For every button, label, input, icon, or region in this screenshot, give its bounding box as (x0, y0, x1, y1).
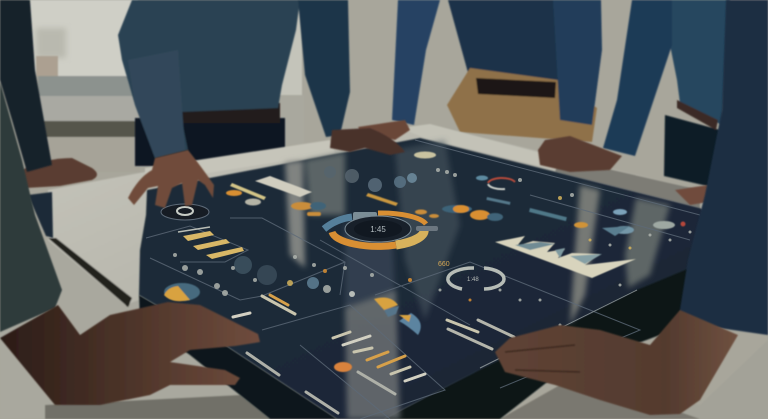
mountain area chart (495, 236, 636, 278)
pale ribbon and small gold marks (226, 152, 439, 218)
table surface and rim (48, 124, 705, 419)
hand: bottom-left foreground (0, 302, 260, 405)
person 3: standing figure with khaki trousers (392, 0, 602, 142)
gauge value and header figures: 660 (438, 261, 450, 268)
top-left mini gauge and yellow bar chart (161, 204, 244, 259)
lower bar list (233, 295, 514, 413)
hand: person 4 at right (675, 185, 708, 205)
person 1: left figure arm and torso (0, 0, 62, 332)
gauge value and header figures: 1:48 (467, 277, 479, 283)
person 4: right figure in navy (603, 0, 730, 188)
hand: person 2 left hand with fingers spread (128, 150, 214, 208)
upper-right pies and rings (442, 176, 686, 236)
window with bright view and sill (28, 0, 304, 172)
dark table reflection at left (28, 192, 53, 238)
dial value: 1:45 (370, 225, 386, 234)
gauge value and header figures (438, 261, 479, 283)
floor (0, 240, 768, 419)
lower pie charts (164, 283, 421, 372)
black frame under the screen (139, 255, 695, 419)
screen panel outlines (146, 140, 700, 419)
hand: person 3 right hand (538, 136, 622, 172)
hand: person 2 right hand and person 3 hand (330, 120, 410, 155)
reflections on screen (285, 140, 670, 419)
donut chart with central dial (324, 212, 438, 246)
hand: bottom-right foreground with forearm (495, 310, 738, 415)
dashboard screen (139, 138, 706, 419)
person 2: standing figure in dark blue shirt (118, 0, 350, 166)
circular gauge (448, 268, 504, 289)
person 5 foreground sleeve (678, 0, 768, 335)
scattered data dots (173, 166, 692, 326)
hand: person 1 on table edge (22, 158, 97, 188)
